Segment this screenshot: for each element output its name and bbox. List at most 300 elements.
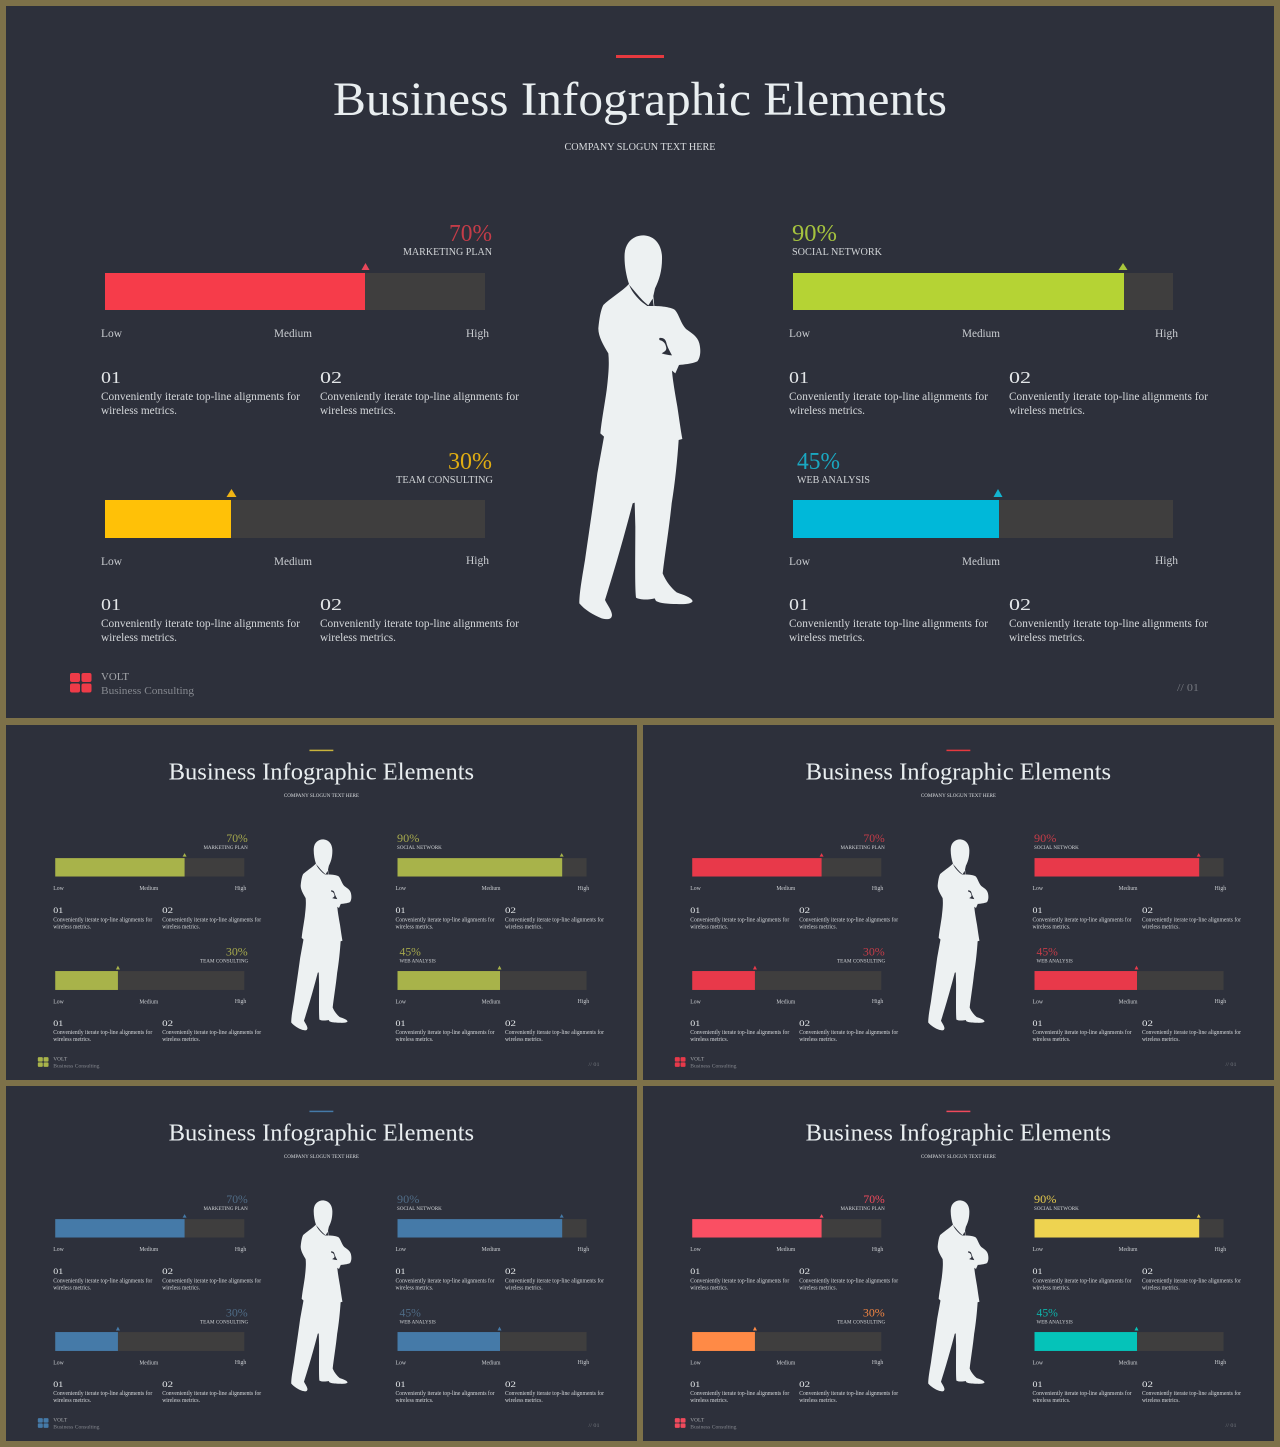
item 01: wireless metrics. xyxy=(789,632,865,644)
item 01 xyxy=(789,595,988,644)
bar fill xyxy=(793,273,1124,310)
panel: social network: Conveniently iterate top-line alignments for xyxy=(505,916,604,923)
label: TEAM CONSULTING xyxy=(396,474,493,486)
item 01: 01 xyxy=(789,595,809,614)
accent line xyxy=(946,1111,970,1112)
panel: team consulting xyxy=(690,945,898,1043)
panel: web analysis: wireless metrics. xyxy=(1142,1398,1180,1404)
panel: social network: 02 xyxy=(1142,1266,1153,1276)
panel: web analysis xyxy=(789,449,1208,644)
panel: marketing plan xyxy=(690,1192,898,1291)
panel: social network: SOCIAL NETWORK xyxy=(1034,845,1079,851)
panel: team consulting: High xyxy=(872,999,883,1005)
brand text: Business Consulting xyxy=(101,685,195,697)
panel: web analysis: wireless metrics. xyxy=(396,1037,434,1043)
panel: social network: Low xyxy=(1033,886,1044,892)
panel: web analysis: Conveniently iterate top-line alignments for xyxy=(1142,1390,1241,1397)
panel: web analysis: 45% xyxy=(1037,945,1058,959)
panel: web analysis: High xyxy=(578,1360,589,1366)
panel: marketing plan xyxy=(53,831,261,930)
panel: team consulting: TEAM CONSULTING xyxy=(837,959,885,965)
panel: team consulting: Low xyxy=(690,1360,702,1366)
scale labels: Medium xyxy=(274,556,312,568)
panel: social network xyxy=(789,221,1208,417)
panel: team consulting: 01 xyxy=(53,1379,63,1389)
brand text: VOLT xyxy=(53,1057,68,1063)
panel: social network: Conveniently iterate top-line alignments for xyxy=(1142,1277,1241,1284)
item 02: wireless metrics. xyxy=(320,632,396,644)
panel: web analysis: High xyxy=(1215,1360,1226,1366)
item 02: Conveniently iterate top-line alignments for xyxy=(320,618,519,630)
label: MARKETING PLAN xyxy=(403,246,492,258)
panel: social network: Low xyxy=(396,1247,407,1253)
panel: team consulting: 02 xyxy=(799,1379,810,1389)
panel: social network: wireless metrics. xyxy=(1142,1285,1180,1291)
businessman silhouette xyxy=(928,839,988,1030)
brand text: VOLT xyxy=(690,1057,705,1063)
panel: web analysis: wireless metrics. xyxy=(1142,1037,1180,1043)
brand text: Business Consulting xyxy=(53,1425,100,1431)
panel: social network: wireless metrics. xyxy=(1033,924,1071,930)
panel: team consulting: High xyxy=(872,1360,883,1366)
item 02 xyxy=(1009,368,1208,417)
panel: main slide xyxy=(6,6,1274,718)
accent line xyxy=(946,750,970,751)
item 02: Conveniently iterate top-line alignments for xyxy=(320,391,519,403)
item 02 xyxy=(1009,595,1208,644)
brand text: VOLT xyxy=(690,1418,705,1424)
panel: team consulting: 01 xyxy=(690,1379,700,1389)
panel: team consulting: wireless metrics. xyxy=(690,1037,729,1043)
item 02 xyxy=(320,368,519,417)
item 01 xyxy=(101,368,300,417)
slogan: COMPANY SLOGUN TEXT HERE xyxy=(284,1154,360,1160)
percentage: 30% xyxy=(448,449,492,475)
page number: // 01 xyxy=(1226,1424,1237,1429)
panel: web analysis xyxy=(396,945,604,1043)
brand logo xyxy=(38,1418,49,1428)
panel: marketing plan: Low xyxy=(690,886,702,892)
panel: social network: SOCIAL NETWORK xyxy=(1034,1206,1079,1212)
panel: web analysis: 02 xyxy=(1142,1379,1153,1389)
scale labels: Low xyxy=(789,556,811,568)
panel: web analysis xyxy=(1033,945,1241,1043)
brand logo xyxy=(38,1057,49,1067)
panel: team consulting: wireless metrics. xyxy=(690,1398,729,1404)
panel: web analysis: Conveniently iterate top-line alignments for xyxy=(1142,1029,1241,1036)
panel: marketing plan: 01 xyxy=(690,905,700,915)
item 01: 01 xyxy=(789,368,809,387)
title: Business Infographic Elements xyxy=(169,1121,474,1147)
panel: social network: 02 xyxy=(505,1266,516,1276)
panel: web analysis: Conveniently iterate top-line alignments for xyxy=(396,1390,495,1397)
panel: marketing plan: High xyxy=(235,1247,246,1253)
scale labels xyxy=(789,328,1178,340)
item 01: Conveniently iterate top-line alignments for xyxy=(789,391,988,403)
panel: marketing plan: Conveniently iterate top-line alignments for xyxy=(690,1277,789,1284)
panel: team consulting xyxy=(53,1306,261,1404)
panel: web analysis: High xyxy=(1215,999,1226,1005)
item 01: 01 xyxy=(101,368,121,387)
panel: web analysis: 45% xyxy=(1037,1306,1058,1320)
title: Business Infographic Elements xyxy=(806,1121,1111,1147)
panel: web analysis: 45% xyxy=(400,945,421,959)
panel: team consulting: wireless metrics. xyxy=(162,1398,201,1404)
panel: web analysis: Medium xyxy=(1119,1360,1138,1366)
title: Business Infographic Elements xyxy=(806,760,1111,786)
panel: team consulting: 02 xyxy=(162,1018,173,1028)
scale labels xyxy=(101,555,489,568)
marker xyxy=(994,489,1002,497)
label: WEB ANALYSIS xyxy=(797,474,870,486)
businessman silhouette xyxy=(579,235,700,619)
panel: team consulting: Medium xyxy=(776,999,796,1005)
panel: social network: 90% xyxy=(397,831,419,845)
scale labels: High xyxy=(466,328,489,340)
panel: web analysis: 01 xyxy=(396,1018,405,1028)
panel: marketing plan: wireless metrics. xyxy=(162,1285,201,1291)
panel: marketing plan: Medium xyxy=(776,1247,796,1253)
panel: web analysis: 01 xyxy=(1033,1018,1042,1028)
panel: marketing plan: MARKETING PLAN xyxy=(203,845,248,851)
panel: social network: Conveniently iterate top-line alignments for xyxy=(1033,916,1132,923)
panel: team consulting: High xyxy=(235,1360,246,1366)
slogan: COMPANY SLOGUN TEXT HERE xyxy=(564,141,716,153)
panel: team consulting: wireless metrics. xyxy=(162,1037,201,1043)
panel: marketing plan: 02 xyxy=(799,905,810,915)
panel: marketing plan: 70% xyxy=(226,1192,248,1206)
panel: marketing plan: 02 xyxy=(799,1266,810,1276)
panel: marketing plan: Conveniently iterate top-line alignments for xyxy=(162,916,261,923)
panel: social network: High xyxy=(578,1247,589,1253)
panel: marketing plan: 70% xyxy=(863,1192,885,1206)
panel: marketing plan: 02 xyxy=(162,1266,173,1276)
panel: blue slide xyxy=(6,1086,637,1441)
panel: marketing plan: Conveniently iterate top-line alignments for xyxy=(799,1277,898,1284)
panel: team consulting: 02 xyxy=(799,1018,810,1028)
panel: marketing plan: 02 xyxy=(162,905,173,915)
panel: web analysis: 01 xyxy=(1033,1379,1042,1389)
panel: social network: High xyxy=(1215,886,1226,892)
panel: social network: Medium xyxy=(482,1247,501,1253)
panel: web analysis: Low xyxy=(1033,999,1044,1005)
panel: social network: SOCIAL NETWORK xyxy=(397,1206,442,1212)
panel: marketing plan: Medium xyxy=(776,886,796,892)
bar track xyxy=(105,500,485,538)
item 01 xyxy=(101,595,300,644)
panel: social network: 01 xyxy=(1033,905,1042,915)
panel: social network xyxy=(1033,831,1241,930)
panel: team consulting: Low xyxy=(53,1360,65,1366)
panel: web analysis xyxy=(396,1306,604,1404)
panel: team consulting: wireless metrics. xyxy=(53,1398,92,1404)
panel: web analysis: Medium xyxy=(482,1360,501,1366)
panel: social network: 90% xyxy=(1034,831,1056,845)
panel: team consulting: 30% xyxy=(863,1306,885,1320)
scale labels: High xyxy=(1155,328,1178,340)
panel: social network: 90% xyxy=(1034,1192,1056,1206)
panel: social network: 01 xyxy=(396,1266,405,1276)
panel: social network: Medium xyxy=(1119,1247,1138,1253)
item 02: wireless metrics. xyxy=(1009,632,1085,644)
panel: team consulting: 30% xyxy=(863,945,885,959)
item 02: 02 xyxy=(320,368,342,387)
panel: web analysis xyxy=(1033,1306,1241,1404)
marker xyxy=(226,489,236,497)
panel: team consulting: Conveniently iterate top-line alignments for xyxy=(162,1029,261,1036)
page number: // 01 xyxy=(589,1424,600,1429)
panel: social network xyxy=(396,1192,604,1291)
panel: web analysis: Low xyxy=(396,999,407,1005)
panel: red slide xyxy=(643,725,1274,1080)
accent line xyxy=(309,750,333,751)
marker xyxy=(362,263,370,270)
panel: team consulting: TEAM CONSULTING xyxy=(200,1320,248,1326)
panel: team consulting: Conveniently iterate top-line alignments for xyxy=(162,1390,261,1397)
panel: marketing plan: Conveniently iterate top-line alignments for xyxy=(690,916,789,923)
panel: team consulting: 30% xyxy=(226,1306,248,1320)
panel: team consulting: 02 xyxy=(162,1379,173,1389)
panel: team consulting: wireless metrics. xyxy=(799,1398,838,1404)
scale labels: High xyxy=(466,555,489,567)
brand text: Business Consulting xyxy=(690,1064,737,1070)
panel: social network xyxy=(1033,1192,1241,1291)
panel: marketing plan: wireless metrics. xyxy=(690,924,729,930)
brand text: Business Consulting xyxy=(53,1064,100,1070)
bar track xyxy=(793,273,1173,310)
panel: team consulting: Conveniently iterate top-line alignments for xyxy=(690,1029,789,1036)
panel: marketing plan: Low xyxy=(53,886,65,892)
bar track xyxy=(793,500,1173,538)
panel: marketing plan: 70% xyxy=(863,831,885,845)
panel: web analysis: Low xyxy=(396,1360,407,1366)
panel: web analysis: WEB ANALYSIS xyxy=(400,1320,436,1326)
panel: marketing plan: wireless metrics. xyxy=(53,924,92,930)
brand text: VOLT xyxy=(101,671,129,683)
panel: social network: Conveniently iterate top-line alignments for xyxy=(1142,916,1241,923)
panel: web analysis: 01 xyxy=(396,1379,405,1389)
accent line xyxy=(309,1111,333,1112)
panel: team consulting xyxy=(53,945,261,1043)
panel: multicolour slide xyxy=(643,1086,1274,1441)
panel: social network: Medium xyxy=(1119,886,1138,892)
item 02: Conveniently iterate top-line alignments for xyxy=(1009,618,1208,630)
slogan: COMPANY SLOGUN TEXT HERE xyxy=(284,793,360,799)
panel: marketing plan: wireless metrics. xyxy=(690,1285,729,1291)
panel: web analysis: wireless metrics. xyxy=(396,1398,434,1404)
panel: team consulting xyxy=(690,1306,898,1404)
item 02: wireless metrics. xyxy=(320,405,396,417)
panel: social network: wireless metrics. xyxy=(505,924,543,930)
panel: social network xyxy=(396,831,604,930)
panel: social network: 01 xyxy=(1033,1266,1042,1276)
bar fill xyxy=(105,273,365,310)
panel: social network: Low xyxy=(1033,1247,1044,1253)
item 02: wireless metrics. xyxy=(1009,405,1085,417)
page number: // 01 xyxy=(1177,683,1199,694)
panel: marketing plan: 01 xyxy=(53,905,63,915)
panel: marketing plan: Medium xyxy=(139,886,159,892)
item 01: Conveniently iterate top-line alignments for xyxy=(101,391,300,403)
item 01: 01 xyxy=(101,595,121,614)
panel: marketing plan: MARKETING PLAN xyxy=(840,845,885,851)
percentage: 70% xyxy=(449,221,492,247)
panel: team consulting: 01 xyxy=(690,1018,700,1028)
brand logo xyxy=(675,1057,686,1067)
item 02: 02 xyxy=(1009,368,1031,387)
page number: // 01 xyxy=(1226,1063,1237,1068)
panel: web analysis: 02 xyxy=(505,1379,516,1389)
panel: social network: High xyxy=(1215,1247,1226,1253)
brand text: Business Consulting xyxy=(690,1425,737,1431)
scale labels xyxy=(101,328,489,340)
panel: web analysis: Conveniently iterate top-line alignments for xyxy=(396,1029,495,1036)
panel: marketing plan: High xyxy=(235,886,246,892)
item 02 xyxy=(320,595,519,644)
panel: marketing plan: wireless metrics. xyxy=(799,924,838,930)
panel: marketing plan: 70% xyxy=(226,831,248,845)
brand logo xyxy=(70,673,92,692)
panel: team consulting xyxy=(101,449,519,644)
panel: social network: wireless metrics. xyxy=(505,1285,543,1291)
panel: web analysis: wireless metrics. xyxy=(505,1398,543,1404)
panel: web analysis: wireless metrics. xyxy=(1033,1398,1071,1404)
percentage: 90% xyxy=(792,221,837,247)
brand text xyxy=(101,671,195,697)
panel: web analysis: Low xyxy=(1033,1360,1044,1366)
panel: social network: Medium xyxy=(482,886,501,892)
brand text xyxy=(53,1418,100,1431)
panel: marketing plan: Conveniently iterate top-line alignments for xyxy=(53,916,152,923)
bar fill xyxy=(793,500,999,538)
panel: team consulting: TEAM CONSULTING xyxy=(837,1320,885,1326)
item 01 xyxy=(789,368,988,417)
panel: marketing plan: MARKETING PLAN xyxy=(840,1206,885,1212)
item 01: Conveniently iterate top-line alignments for xyxy=(789,618,988,630)
panel: team consulting: Medium xyxy=(139,1360,159,1366)
panel: social network: Low xyxy=(396,886,407,892)
panel: marketing plan: wireless metrics. xyxy=(799,1285,838,1291)
panel: web analysis: Conveniently iterate top-line alignments for xyxy=(505,1390,604,1397)
panel: social network: wireless metrics. xyxy=(1142,924,1180,930)
item 02: Conveniently iterate top-line alignments for xyxy=(1009,391,1208,403)
panel: marketing plan: Medium xyxy=(139,1247,159,1253)
panel: social network: Conveniently iterate top-line alignments for xyxy=(505,1277,604,1284)
panel: web analysis: WEB ANALYSIS xyxy=(400,959,436,965)
panel: web analysis: 02 xyxy=(505,1018,516,1028)
panel: web analysis: wireless metrics. xyxy=(505,1037,543,1043)
brand text xyxy=(690,1057,737,1070)
marker xyxy=(1118,263,1128,270)
brand text: VOLT xyxy=(53,1418,68,1424)
panel: web analysis: High xyxy=(578,999,589,1005)
panel: marketing plan xyxy=(690,831,898,930)
title: Business Infographic Elements xyxy=(333,73,947,126)
item 02: 02 xyxy=(320,595,342,614)
title: Business Infographic Elements xyxy=(169,760,474,786)
scale labels: Low xyxy=(101,328,123,340)
brand logo xyxy=(675,1418,686,1428)
panel: web analysis: wireless metrics. xyxy=(1033,1037,1071,1043)
panel: social network: 02 xyxy=(1142,905,1153,915)
panel: marketing plan xyxy=(53,1192,261,1291)
panel: team consulting: 01 xyxy=(53,1018,63,1028)
panel: web analysis: Medium xyxy=(482,999,501,1005)
bar track xyxy=(105,273,485,310)
panel: web analysis: Conveniently iterate top-line alignments for xyxy=(1033,1029,1132,1036)
panel: social network: 02 xyxy=(505,905,516,915)
panel: marketing plan: High xyxy=(872,1247,883,1253)
panel: social network: Conveniently iterate top-line alignments for xyxy=(396,1277,495,1284)
panel: team consulting: wireless metrics. xyxy=(53,1037,92,1043)
percentage: 45% xyxy=(797,449,840,475)
panel: marketing plan: Conveniently iterate top-line alignments for xyxy=(799,916,898,923)
label: SOCIAL NETWORK xyxy=(792,246,882,258)
item 02: 02 xyxy=(1009,595,1031,614)
panel: web analysis: Conveniently iterate top-line alignments for xyxy=(505,1029,604,1036)
accent line xyxy=(616,55,664,58)
panel: web analysis: 45% xyxy=(400,1306,421,1320)
panel: marketing plan: High xyxy=(872,886,883,892)
panel: team consulting: TEAM CONSULTING xyxy=(200,959,248,965)
panel: team consulting: Medium xyxy=(139,999,159,1005)
item 01: Conveniently iterate top-line alignments for xyxy=(101,618,300,630)
panel: social network: wireless metrics. xyxy=(396,924,434,930)
panel: marketing plan: Conveniently iterate top-line alignments for xyxy=(53,1277,152,1284)
panel: team consulting: Conveniently iterate top-line alignments for xyxy=(53,1390,152,1397)
panel: team consulting: 30% xyxy=(226,945,248,959)
panel: social network: High xyxy=(578,886,589,892)
scale labels: High xyxy=(1155,555,1178,567)
panel: team consulting: Conveniently iterate top-line alignments for xyxy=(690,1390,789,1397)
businessman silhouette xyxy=(291,1200,351,1391)
businessman silhouette xyxy=(291,839,351,1030)
panel: social network: wireless metrics. xyxy=(396,1285,434,1291)
panel: marketing plan: wireless metrics. xyxy=(53,1285,92,1291)
panel: marketing plan: 01 xyxy=(53,1266,63,1276)
panel: marketing plan: Conveniently iterate top-line alignments for xyxy=(162,1277,261,1284)
panel: team consulting: Low xyxy=(690,999,702,1005)
panel: social network: 90% xyxy=(397,1192,419,1206)
panel: social network: SOCIAL NETWORK xyxy=(397,845,442,851)
slogan: COMPANY SLOGUN TEXT HERE xyxy=(921,1154,997,1160)
panel: web analysis: Conveniently iterate top-line alignments for xyxy=(1033,1390,1132,1397)
panel: marketing plan: MARKETING PLAN xyxy=(203,1206,248,1212)
panel: social network: Conveniently iterate top-line alignments for xyxy=(396,916,495,923)
panel: marketing plan: Low xyxy=(690,1247,702,1253)
scale labels: Low xyxy=(789,328,811,340)
panel: marketing plan: 01 xyxy=(690,1266,700,1276)
scale labels: Medium xyxy=(274,328,312,340)
scale labels xyxy=(789,555,1178,568)
panel: team consulting: Conveniently iterate top-line alignments for xyxy=(53,1029,152,1036)
item 01: wireless metrics. xyxy=(101,405,177,417)
brand text xyxy=(53,1057,100,1070)
panel: team consulting: High xyxy=(235,999,246,1005)
panel: green slide xyxy=(6,725,637,1080)
panel: team consulting: Conveniently iterate top-line alignments for xyxy=(799,1390,898,1397)
panel: team consulting: Low xyxy=(53,999,65,1005)
panel: marketing plan: Low xyxy=(53,1247,65,1253)
page number: // 01 xyxy=(589,1063,600,1068)
brand text xyxy=(690,1418,737,1431)
panel: web analysis: Medium xyxy=(1119,999,1138,1005)
panel: web analysis: WEB ANALYSIS xyxy=(1037,959,1073,965)
panel: social network: Conveniently iterate top-line alignments for xyxy=(1033,1277,1132,1284)
panel: marketing plan xyxy=(101,221,519,417)
panel: social network: wireless metrics. xyxy=(1033,1285,1071,1291)
scale labels: Low xyxy=(101,556,123,568)
